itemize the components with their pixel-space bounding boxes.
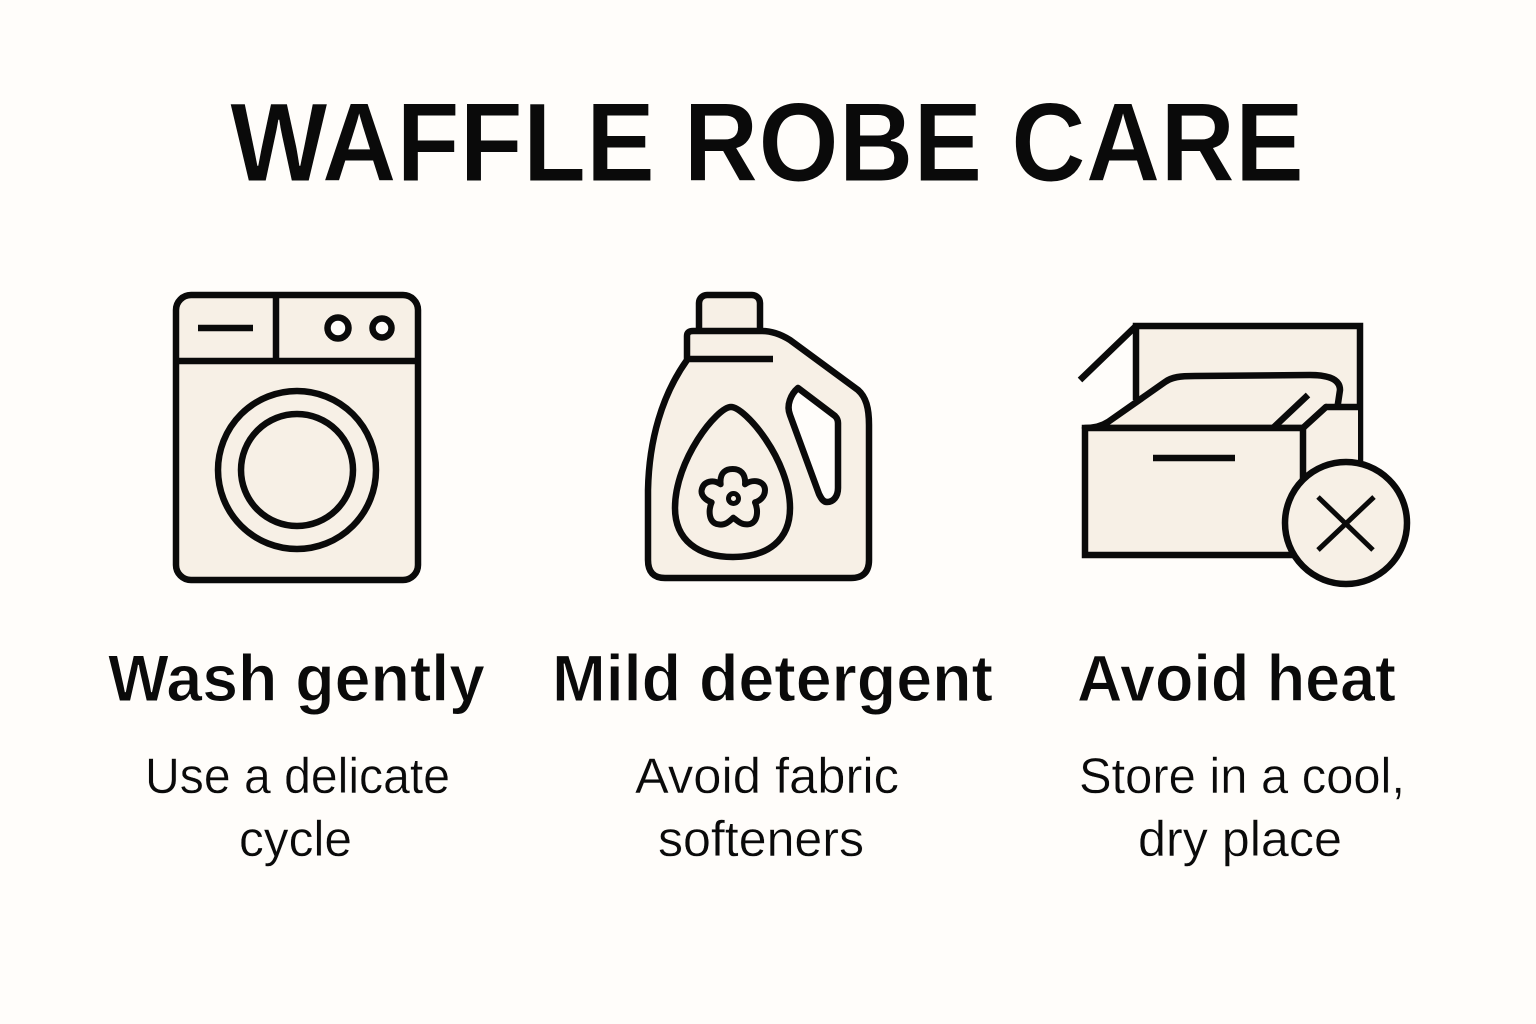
heading: mild detergent: Mild detergent [552, 641, 993, 715]
text: avoid fabric softeners: softeners [658, 811, 864, 867]
icon: washing machine [176, 295, 418, 580]
title: WAFFLE ROBE CARE [230, 80, 1304, 205]
text: store in a cool, dry place: dry place [1138, 811, 1342, 867]
text: use a delicate cycle: cycle [239, 811, 352, 867]
icon: detergent bottle [648, 295, 869, 578]
panel: wash gently [108, 295, 485, 867]
heading: avoid heat: Avoid heat [1077, 641, 1396, 715]
panel: mild detergent [552, 295, 993, 867]
text: store in a cool, dry place [1079, 748, 1405, 867]
text: avoid fabric softeners [635, 748, 899, 867]
panel: avoid heat [1077, 326, 1407, 867]
text: use a delicate cycle [145, 748, 450, 867]
text: avoid fabric softeners: Avoid fabric [635, 748, 899, 804]
heading: wash gently: Wash gently [108, 641, 485, 715]
icon: storage box with garment and no-heat mark [1080, 326, 1407, 584]
text: use a delicate cycle: Use a delicate [145, 748, 450, 804]
text: store in a cool, dry place: Store in a cool, [1079, 748, 1405, 804]
